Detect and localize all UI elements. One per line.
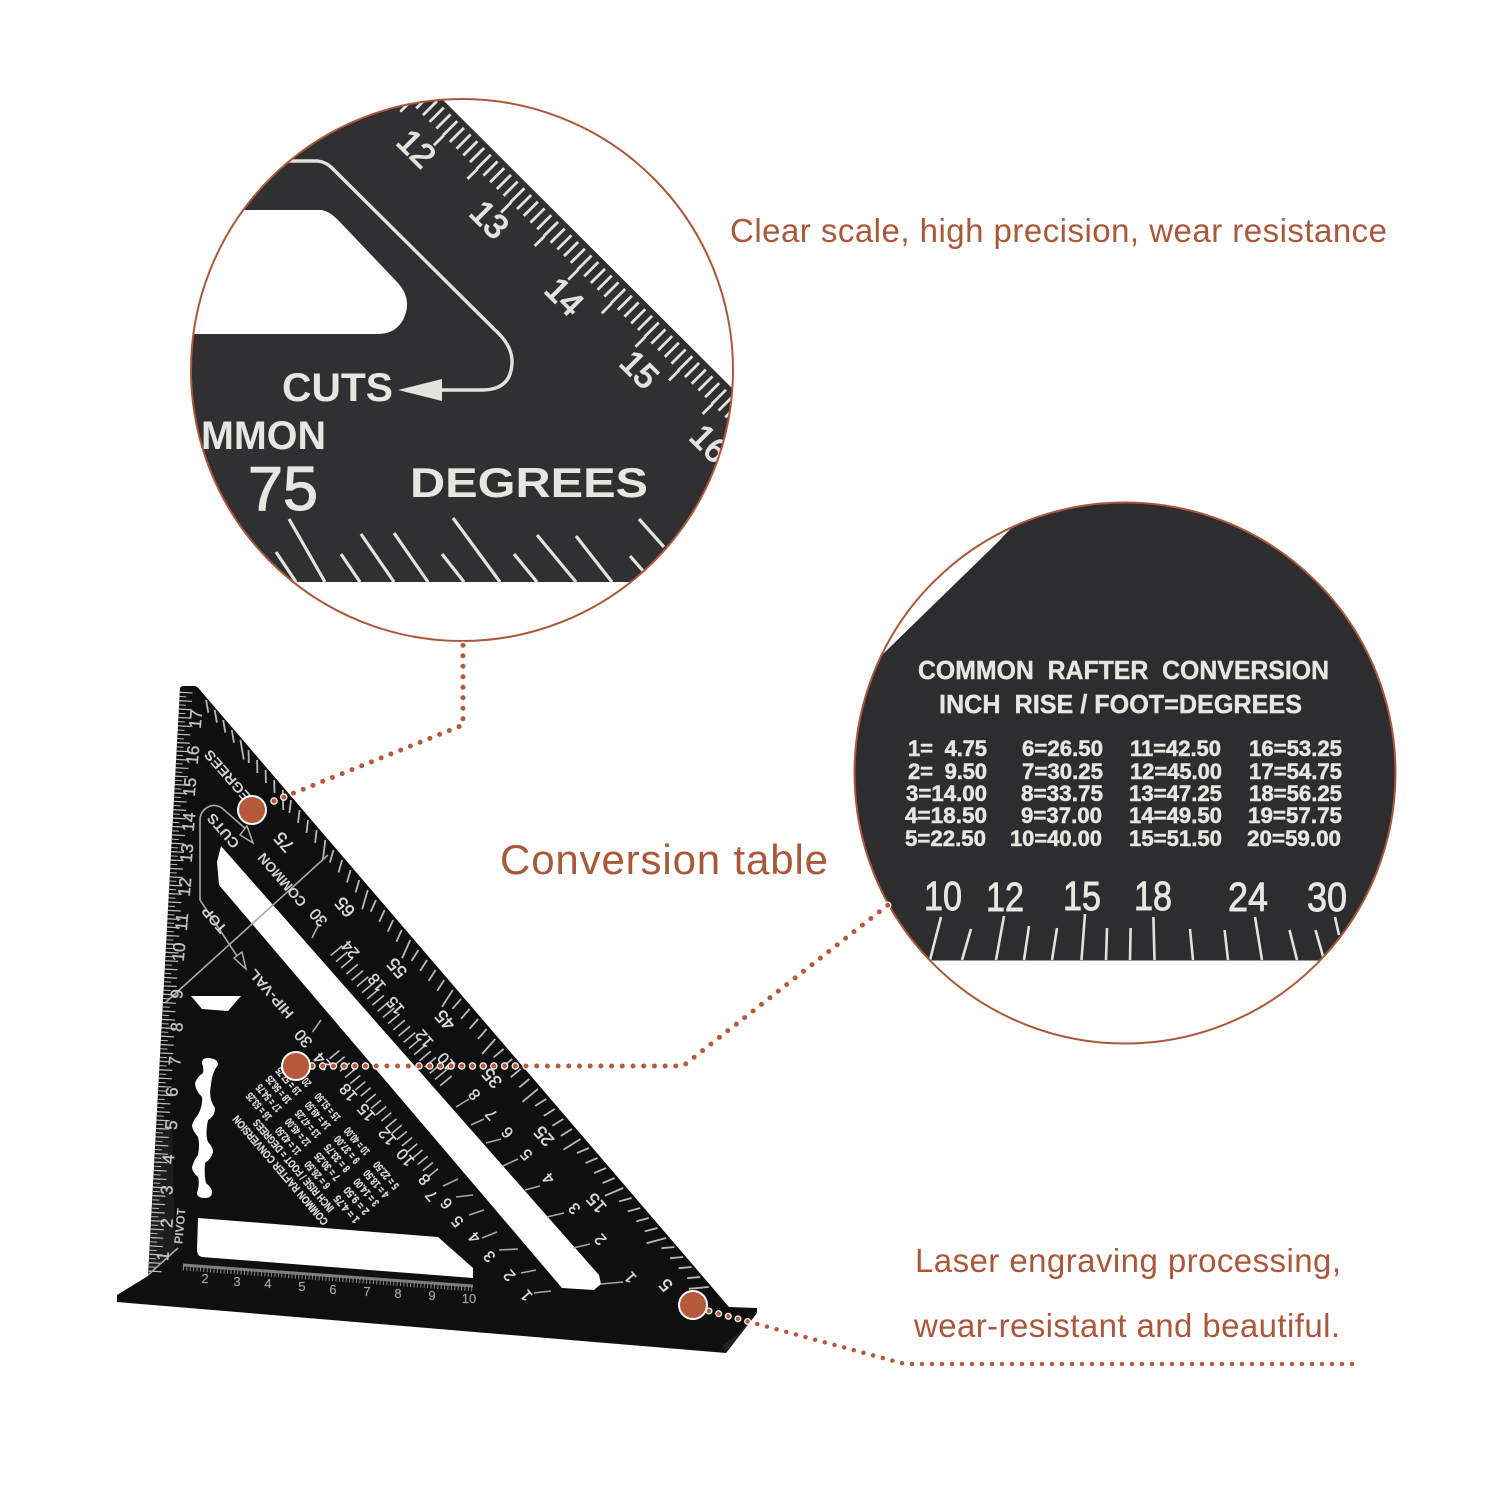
engraved words on the square: HIP-VAL xyxy=(245,966,297,1022)
conversion table values: 9=37.00 xyxy=(1021,803,1102,828)
degree scale numbers along hypotenuse: 65 xyxy=(331,893,359,921)
conversion table values: 8=33.75 xyxy=(1021,781,1103,806)
marker dot: scale xyxy=(238,796,266,824)
engraved words CUTS, COMMON, 75, DEGREES xyxy=(204,373,646,512)
icon: CUTS arrow head xyxy=(398,379,442,401)
scale numbers 12 to 16: 14 xyxy=(537,270,591,324)
small engraved conversion table: 8 = 33.75 xyxy=(322,1141,353,1174)
conversion table title: INCH RISE / FOOT=DEGREES xyxy=(939,689,1302,719)
text: laser engraving caption xyxy=(913,1242,1341,1344)
engraved words on the square: TOP xyxy=(198,903,230,937)
small engraved conversion table: 12 = 45.00 xyxy=(283,1115,314,1148)
left edge inch numbers: PIVOT xyxy=(171,1207,189,1245)
text: conversion table caption: Conversion table xyxy=(500,836,828,883)
rafter scale numbers above slot: 2 xyxy=(592,1230,610,1248)
small engraved conversion table: 11 = 42.50 xyxy=(273,1124,304,1157)
rafter scale numbers below slot: 1 xyxy=(518,1286,536,1304)
scale numbers 10 to 30: 18 xyxy=(1134,873,1172,919)
degree scale numbers along hypotenuse xyxy=(270,828,677,1295)
rafter scale numbers below slot: 18 xyxy=(337,1080,361,1104)
left edge inch numbers: 8 xyxy=(167,1021,187,1033)
rafter scale numbers above slot: 8 xyxy=(466,1085,484,1103)
panel: zoomed scale detail circle xyxy=(190,98,734,642)
left edge inch numbers: 1 xyxy=(153,1250,173,1262)
rafter scale numbers above slot: 18 xyxy=(365,970,390,994)
small engraved conversion table: 2 = 9.50 xyxy=(342,1184,372,1217)
degree scale numbers along hypotenuse: 5 xyxy=(655,1275,677,1295)
rafter scale numbers above slot: 15 xyxy=(384,993,408,1017)
left edge inch numbers: 7 xyxy=(165,1055,185,1067)
small engraved conversion table: COMMON RAFTER CONVERSION xyxy=(231,1113,331,1227)
small engraved conversion table: 15 = 51.50 xyxy=(313,1090,343,1123)
small engraved conversion table: 13 = 47.25 xyxy=(293,1107,324,1140)
small engraved conversion table: 1 = 4.75 xyxy=(332,1192,362,1225)
small engraved conversion table: 10 = 40.00 xyxy=(342,1124,373,1157)
conversion table values: 4=18.50 xyxy=(905,803,987,828)
rafter scale numbers above slot: 4 xyxy=(540,1169,558,1187)
left edge inch numbers: 10 xyxy=(169,942,189,962)
degree scale numbers along hypotenuse: 15 xyxy=(582,1189,611,1217)
dotted leader: conversion table xyxy=(312,905,888,1066)
scale numbers 10 to 30 xyxy=(926,881,1346,912)
conversion table values: 7=30.25 xyxy=(1022,759,1103,784)
base ruler numbers: 6 xyxy=(329,1282,337,1297)
left edge inch numbers: 4 xyxy=(159,1153,178,1165)
small engraved conversion table: 3 = 14.00 xyxy=(352,1175,382,1208)
text: laser engraving caption: wear-resistant and beautiful. xyxy=(913,1307,1340,1344)
left edge inch numbers: 5 xyxy=(162,1119,181,1131)
rafter scale numbers below slot: 7 xyxy=(423,1186,441,1204)
rafter scale numbers above slot: 1 xyxy=(622,1268,640,1286)
base ruler numbers: 5 xyxy=(298,1279,306,1294)
square body xyxy=(117,686,757,1353)
conversion table values: 14=49.50 xyxy=(1129,803,1222,828)
conversion table values: 10=40.00 xyxy=(1010,826,1102,851)
engraved words on the square: COMMON xyxy=(254,850,310,910)
conversion table values: 5=22.50 xyxy=(905,826,986,851)
rafter scale numbers below slot: 4 xyxy=(466,1228,484,1246)
scale numbers 10 to 30: 30 xyxy=(1307,874,1347,920)
conversion table values xyxy=(905,736,1342,851)
conversion table values: 19=57.75 xyxy=(1248,803,1342,828)
marker dot: laser engraving xyxy=(679,1291,707,1319)
rafter scale numbers above slot: 24 xyxy=(339,937,363,961)
engraved words on the square: CUTS xyxy=(204,810,242,852)
rafter scale numbers below slot: 30 xyxy=(292,1026,316,1050)
degree scale numbers along hypotenuse: 25 xyxy=(530,1122,558,1150)
small engraved conversion table: 7 = 30.25 xyxy=(312,1150,343,1183)
small engraved conversion table xyxy=(225,1056,402,1241)
rafter scale numbers below slot: 10 xyxy=(394,1145,418,1169)
degree scale numbers along hypotenuse: 45 xyxy=(431,1006,459,1034)
rafter scale numbers above slot: 6 xyxy=(499,1123,517,1141)
conversion table values: 6=26.50 xyxy=(1022,736,1103,761)
conversion table title: COMMON RAFTER CONVERSION xyxy=(918,655,1329,685)
rafter scale numbers below slot: 24 xyxy=(311,1049,335,1073)
small engraved conversion table: 14 = 49.50 xyxy=(303,1099,334,1131)
conversion table values: 20=59.00 xyxy=(1247,826,1341,851)
engraved words on the square xyxy=(198,747,310,1022)
rafter scale numbers above slot: 5 xyxy=(518,1145,536,1163)
small engraved conversion table: 18 = 56.25 xyxy=(264,1073,294,1106)
small engraved conversion table: 19 = 57.75 xyxy=(274,1064,304,1097)
rafter scale numbers below slot: 3 xyxy=(481,1247,499,1265)
rafter scale numbers below slot: 12 xyxy=(376,1124,400,1148)
left edge inch numbers: 15 xyxy=(180,777,200,797)
small engraved conversion table: 20 = 59.00 xyxy=(284,1056,314,1089)
engraved words CUTS, COMMON, 75, DEGREES: MMON xyxy=(201,414,326,458)
rafter scale numbers above slot: 12 xyxy=(413,1026,437,1050)
rafter scale numbers above slot: 30 xyxy=(307,905,331,929)
base ruler numbers: 2 xyxy=(201,1271,209,1286)
conversion table values: 17=54.75 xyxy=(1249,759,1342,784)
scale numbers 12 to 16 xyxy=(389,122,736,471)
scale numbers 12 to 16: 15 xyxy=(612,343,666,397)
left edge inch numbers: 17 xyxy=(186,709,206,729)
scale numbers 10 to 30: 10 xyxy=(924,873,962,919)
marker dot: conversion table xyxy=(282,1052,310,1080)
rafter square tool xyxy=(117,686,757,1353)
small engraved conversion table: INCH RISE / FOOT = DEGREES xyxy=(251,1117,337,1214)
conversion table values: 18=56.25 xyxy=(1249,781,1342,806)
conversion table values: 15=51.50 xyxy=(1129,826,1222,851)
left edge inch numbers: 14 xyxy=(179,812,199,832)
rafter scale numbers below slot: 6 xyxy=(438,1194,456,1212)
infographic canvas xyxy=(117,98,1396,1366)
rafter scale numbers below slot xyxy=(292,1026,536,1304)
conversion table values: 1= 4.75 xyxy=(908,736,987,761)
degree scale numbers along hypotenuse: 55 xyxy=(383,954,411,982)
conversion table values: 12=45.00 xyxy=(1130,759,1222,784)
left edge inch numbers: 6 xyxy=(162,1086,182,1098)
rafter scale numbers above slot: 3 xyxy=(566,1199,584,1217)
engraved words CUTS, COMMON, 75, DEGREES: CUTS xyxy=(282,366,393,410)
dotted leader: scale xyxy=(274,642,463,801)
small engraved conversion table: 16 = 53.25 xyxy=(244,1090,275,1123)
rafter scale numbers above slot: 10 xyxy=(435,1049,459,1073)
scale numbers 10 to 30: 15 xyxy=(1063,873,1101,919)
conversion table values: 11=42.50 xyxy=(1130,736,1221,761)
left edge inch numbers xyxy=(153,709,206,1262)
left edge inch numbers: 11 xyxy=(172,912,192,932)
conversion table title xyxy=(918,660,1328,714)
left edge inch numbers: 13 xyxy=(177,843,197,863)
rafter scale numbers below slot: 15 xyxy=(355,1100,379,1124)
rafter scale numbers below slot: 2 xyxy=(501,1266,519,1284)
engraved words CUTS, COMMON, 75, DEGREES: DEGREES xyxy=(410,459,648,506)
rafter scale numbers above slot xyxy=(307,905,640,1286)
conversion table values: 16=53.25 xyxy=(1249,736,1342,761)
base ruler numbers: 7 xyxy=(363,1284,371,1299)
engraved words CUTS, COMMON, 75, DEGREES: 75 xyxy=(248,455,318,524)
small engraved conversion table: 17 = 54.75 xyxy=(254,1081,285,1114)
panel: zoomed conversion table circle xyxy=(840,480,1420,1044)
small engraved conversion table: 4 = 18.50 xyxy=(361,1167,392,1200)
base ruler numbers: 3 xyxy=(233,1274,241,1289)
base ruler numbers: 10 xyxy=(462,1291,476,1306)
scale numbers 12 to 16: 12 xyxy=(389,122,443,176)
left edge inch numbers: 16 xyxy=(183,745,203,765)
icon: CUTS and TOP arrow heads on square xyxy=(234,826,253,969)
base ruler numbers: 8 xyxy=(394,1286,402,1301)
base ruler numbers xyxy=(201,1271,476,1306)
base ruler numbers: 9 xyxy=(428,1288,436,1303)
conversion table values: 13=47.25 xyxy=(1129,781,1222,806)
dotted leader: laser engraving xyxy=(709,1311,1356,1364)
left edge inch numbers: 12 xyxy=(175,877,195,897)
left edge inch numbers: 9 xyxy=(167,988,187,1000)
base ruler numbers: 4 xyxy=(264,1276,272,1291)
degree scale numbers along hypotenuse: 35 xyxy=(478,1064,506,1092)
rafter scale numbers above slot: 7 xyxy=(483,1105,501,1123)
small engraved conversion table: 5 = 22.50 xyxy=(371,1159,402,1191)
scale numbers 10 to 30: 12 xyxy=(986,874,1024,920)
rafter scale numbers below slot: 5 xyxy=(449,1212,467,1230)
small engraved conversion table: 6 = 26.50 xyxy=(303,1158,333,1191)
rafter scale numbers below slot: 8 xyxy=(416,1170,434,1188)
scale numbers 10 to 30: 24 xyxy=(1228,874,1268,920)
conversion table values: 2= 9.50 xyxy=(908,759,987,784)
degree scale numbers along hypotenuse: 75 xyxy=(270,828,298,856)
text: laser engraving caption: Laser engraving processing, xyxy=(915,1242,1341,1279)
scale numbers 12 to 16: 13 xyxy=(462,193,516,247)
left edge inch numbers: 2 xyxy=(157,1217,177,1229)
hypotenuse tick marks xyxy=(206,700,709,1289)
engraved words on the square: DEGREES xyxy=(201,747,261,813)
left edge inch numbers: 3 xyxy=(157,1184,177,1196)
conversion table values: 3=14.00 xyxy=(906,781,987,806)
scale numbers 12 to 16: 16 xyxy=(682,417,736,471)
small engraved conversion table: 9 = 37.00 xyxy=(332,1133,363,1166)
text: clear scale caption: Clear scale, high precision, wear resistance xyxy=(730,212,1387,249)
